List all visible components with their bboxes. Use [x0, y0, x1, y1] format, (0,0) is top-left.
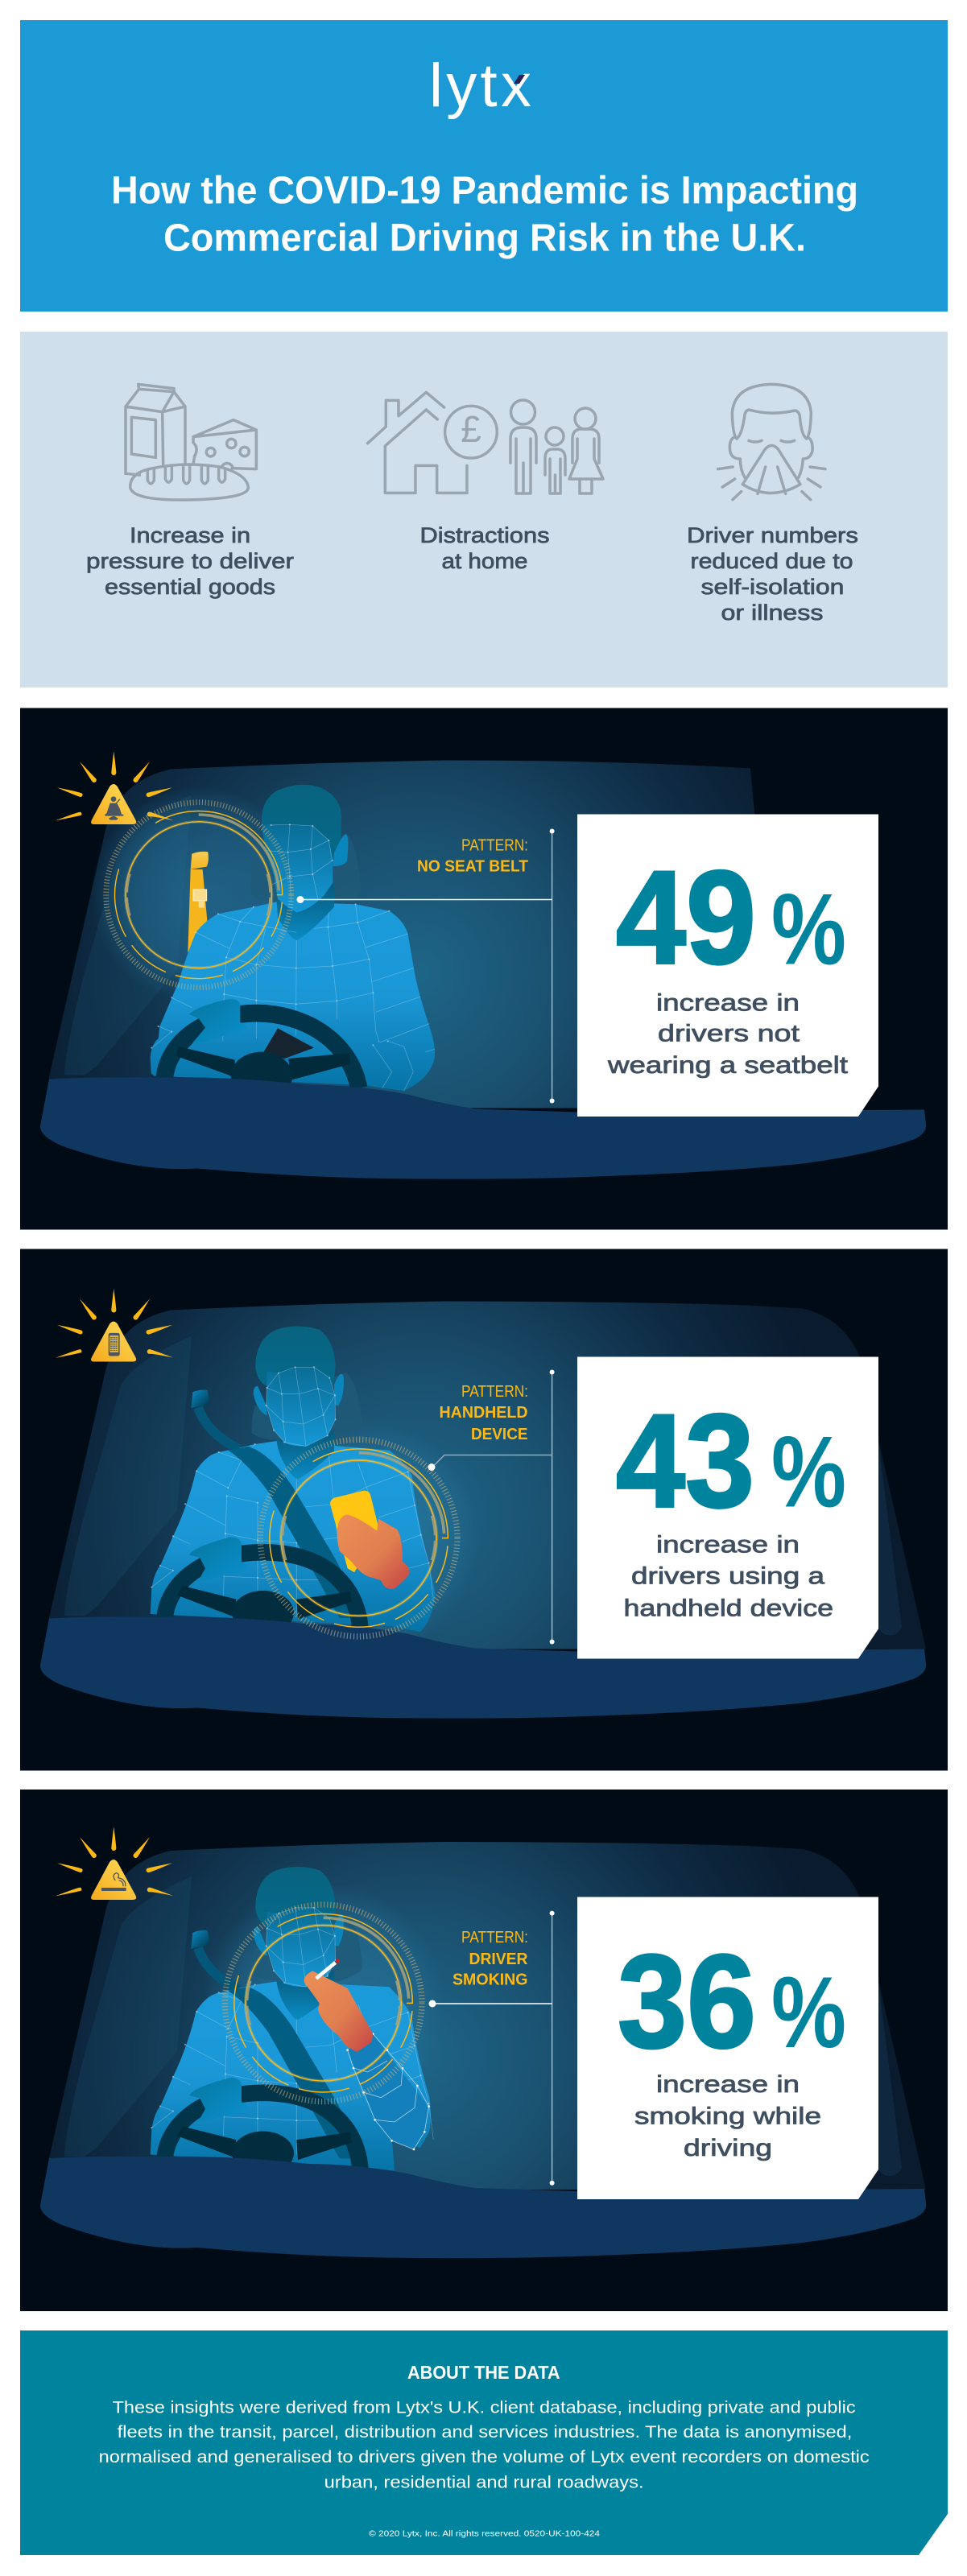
label: handheld device: HANDHELD — [440, 1404, 528, 1422]
text: pressure to deliver — [86, 523, 294, 599]
stat card: 36%: 36 — [618, 1927, 756, 2075]
stat card: 36% — [577, 1897, 878, 2199]
label: driver smoking — [453, 1929, 528, 1989]
text: driver numbers reduced: Driver numbers — [687, 523, 858, 547]
stat card: 43%: increase in — [656, 1531, 800, 1558]
stat card: 49%: % — [771, 874, 846, 985]
text: driver numbers reduced — [687, 523, 858, 625]
stat card: 36%: % — [771, 1957, 846, 2069]
logo: lytx: lytx — [429, 52, 531, 120]
text: data description: fleets in the transit, parcel, distribution and services industries. The data is anonymised, — [118, 2422, 852, 2442]
label: handheld device: DEVICE — [471, 1426, 528, 1443]
stat card: 36%: smoking while — [634, 2103, 821, 2130]
scanner ring — [225, 1905, 422, 2102]
panel: handheld device — [20, 1249, 948, 1771]
stat card: 43% — [577, 1357, 878, 1658]
stat card: 49% — [577, 815, 878, 1117]
icon: sneezing driver — [718, 384, 825, 500]
text: distractions at home: Distractions — [420, 523, 549, 547]
illustration: driver smoking — [151, 1867, 433, 2175]
heading: about the data: ABOUT THE DATA — [407, 2362, 560, 2383]
label: driver smoking: DRIVER — [469, 1951, 528, 1968]
icon: smoking warning — [56, 1827, 173, 1900]
pointer line — [296, 829, 555, 1103]
stat card: 36%: increase in — [656, 2071, 800, 2098]
stat card: 36%: driving — [684, 2135, 772, 2161]
icon: house, money and family — [368, 392, 603, 493]
text: driver numbers reduced: self-isolation — [700, 575, 844, 599]
label: driver smoking: PATTERN: — [461, 1929, 528, 1946]
pointer line — [428, 1911, 555, 2186]
icon: seat belt warning — [56, 751, 173, 824]
text: data description: These insights were derived from Lytx's U.K. client database, including private and public — [113, 2397, 856, 2417]
unfastened seat belt — [188, 852, 209, 952]
panel: driver smoking — [20, 1790, 948, 2311]
text: data description: urban, residential and rural roadways. — [324, 2473, 644, 2492]
text: distractions at home — [420, 523, 549, 573]
text: pressure to deliver: pressure to deliver — [86, 549, 294, 573]
stat card: 49%: wearing a seatbelt — [607, 1052, 849, 1079]
illustration: driver holding a handheld device — [151, 1326, 436, 1635]
scanner ring — [106, 803, 291, 988]
label: no seat belt: NO SEAT BELT — [417, 858, 528, 876]
title: Commercial Driving Risk in the U.K. — [163, 217, 806, 260]
panel: about the data — [20, 2330, 948, 2555]
text: driver numbers reduced: or illness — [721, 601, 823, 625]
text: pressure to deliver: Increase in — [130, 523, 250, 547]
text: data description — [99, 2397, 870, 2492]
text: driver numbers reduced: reduced due to — [691, 549, 853, 573]
stat card: 49%: drivers not — [658, 1021, 800, 1046]
icon: phone warning — [56, 1289, 173, 1361]
stat card: 43%: % — [771, 1417, 846, 1528]
text: pressure to deliver: essential goods — [105, 575, 275, 599]
stat card: 49%: increase in — [656, 990, 800, 1016]
label: no seat belt — [417, 837, 528, 876]
stat card: 43%: drivers using a — [631, 1563, 824, 1589]
phone in hand — [330, 1491, 410, 1589]
scanner ring — [260, 1439, 457, 1637]
label: no seat belt: PATTERN: — [461, 837, 528, 855]
panel: header — [20, 20, 948, 312]
label: driver smoking: SMOKING — [453, 1971, 528, 1989]
raised arm, hand and cigarette — [304, 1959, 429, 2149]
label: handheld device: PATTERN: — [461, 1383, 528, 1401]
text: data description: normalised and generalised to drivers given the volume of Lytx event recorders on domestic — [99, 2447, 870, 2467]
title: How the COVID-19 Pandemic is Impacting — [111, 170, 858, 213]
pointer line — [428, 1370, 555, 1644]
stat card: 43%: handheld device — [623, 1596, 833, 1621]
text: copyright: © 2020 Lytx, Inc. All rights reserved. 0520-UK-100-424 — [369, 2529, 600, 2539]
title — [111, 170, 858, 260]
stat card: 49%: 49 — [616, 844, 756, 992]
stat card: 43%: 43 — [616, 1386, 754, 1534]
label: handheld device — [440, 1383, 528, 1443]
illustration: driver without seat belt — [151, 785, 435, 1100]
icon: house, money and family: £ — [461, 408, 481, 450]
text: distractions at home: at home — [441, 549, 528, 573]
panel: pandemic factors — [20, 332, 948, 687]
icon: milk, cheese and bread — [126, 384, 256, 500]
panel: no seat belt — [20, 708, 948, 1230]
